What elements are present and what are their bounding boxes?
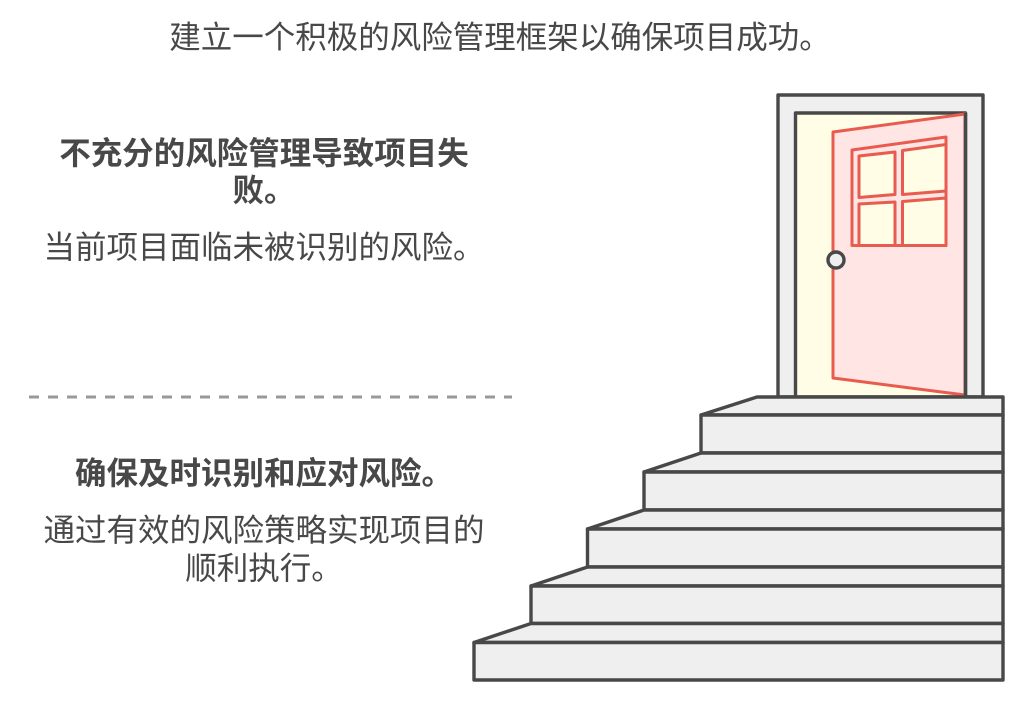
text: effective strategy: 通过有效的风险策略实现项目的 <box>43 512 484 548</box>
title: 建立一个积极的风险管理框架以确保项目成功。 <box>169 19 831 55</box>
heading: inadequate risk management <box>59 134 469 208</box>
heading: inadequate risk management: 败。 <box>232 172 296 208</box>
heading: inadequate risk management: 不充分的风险管理导致项目失 <box>59 134 469 170</box>
text: current risks: 当前项目面临未被识别的风险。 <box>43 229 484 265</box>
text: effective strategy: 顺利执行。 <box>185 550 343 586</box>
heading: timely response: 确保及时识别和应对风险。 <box>75 455 453 491</box>
icon: stairs <box>474 397 1003 680</box>
icon: door <box>778 95 983 397</box>
text: effective strategy <box>43 512 484 586</box>
